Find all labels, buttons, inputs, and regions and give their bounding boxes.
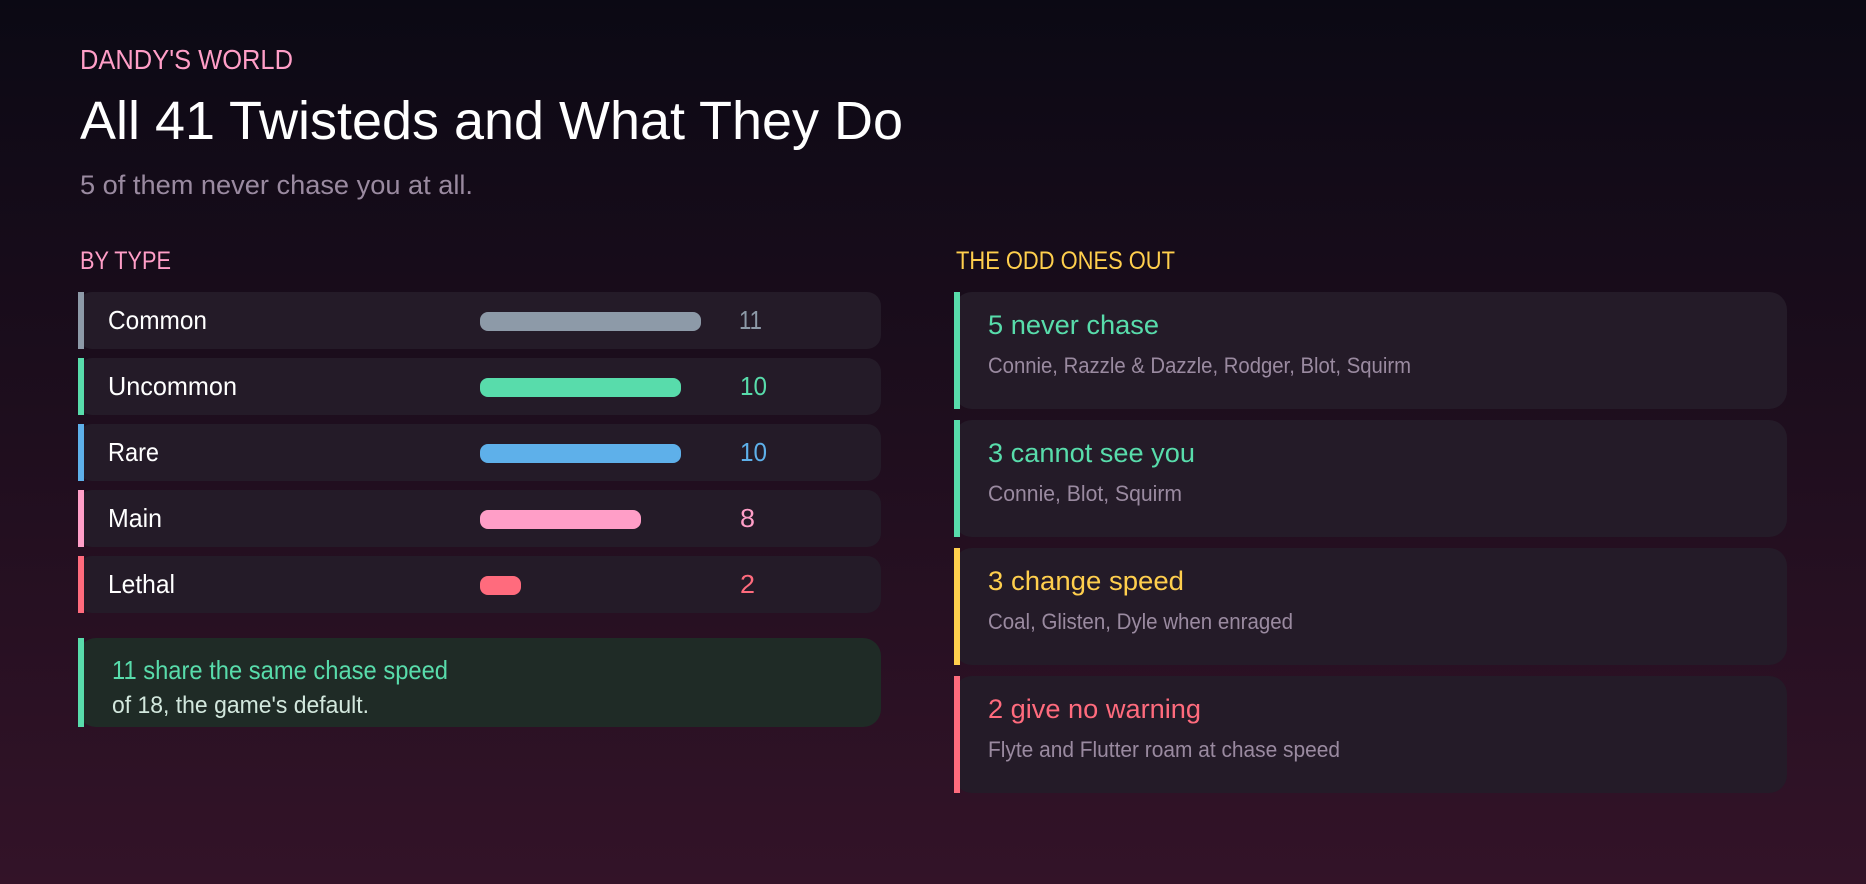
card: change speed: 3 change speed (988, 566, 1184, 596)
card: no warning: 2 give no warning (988, 694, 1201, 724)
callout: shared chase speed: of 18, the game's default. (112, 692, 369, 719)
card: never chase: 5 never chase (988, 310, 1159, 340)
row: main: 8 (740, 503, 755, 533)
card: never chase (954, 292, 1787, 409)
row: common (78, 292, 881, 349)
row: uncommon: 10 (740, 371, 767, 401)
row: common: Common (108, 305, 207, 335)
row: rare (78, 424, 881, 481)
row: common: 11 (739, 305, 762, 335)
card: cannot see you (954, 420, 1787, 537)
subtitle: 5 of them never chase you at all. (80, 170, 473, 200)
card: no warning: Flyte and Flutter roam at chase speed (988, 737, 1340, 762)
row: rare: 10 (740, 437, 767, 467)
card: cannot see you: 3 cannot see you (988, 438, 1195, 468)
row: lethal: Lethal (108, 569, 175, 599)
panel: by type (78, 247, 881, 727)
header (80, 44, 903, 200)
row: rare: Rare (108, 437, 159, 467)
row: lethal: 2 (740, 569, 755, 599)
card: cannot see you: Connie, Blot, Squirm (988, 481, 1182, 506)
panel: the odd ones out (954, 247, 1787, 793)
callout: shared chase speed: 11 share the same chase speed (112, 655, 448, 685)
heading: by type: BY TYPE (80, 247, 171, 275)
callout: shared chase speed (78, 638, 881, 727)
heading: the odd ones out: THE ODD ONES OUT (956, 247, 1175, 275)
card: no warning (954, 676, 1787, 793)
kicker: DANDY'S WORLD (80, 44, 293, 75)
title: All 41 Twisteds and What They Do (80, 91, 903, 151)
row: uncommon: Uncommon (108, 371, 237, 401)
card: change speed: Coal, Glisten, Dyle when enraged (988, 609, 1293, 634)
row: lethal (78, 556, 881, 613)
card: never chase: Connie, Razzle & Dazzle, Rodger, Blot, Squirm (988, 353, 1411, 378)
row: main (78, 490, 881, 547)
card: change speed (954, 548, 1787, 665)
row: main: Main (108, 503, 162, 533)
row: uncommon (78, 358, 881, 415)
